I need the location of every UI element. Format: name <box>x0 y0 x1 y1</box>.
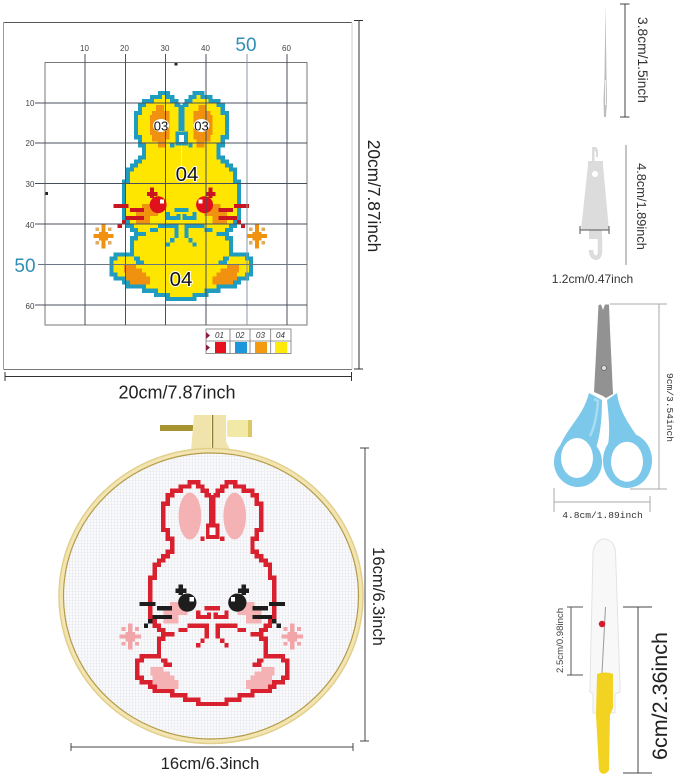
colour region numbers: 04 <box>176 163 198 186</box>
left axis labels <box>14 99 36 311</box>
left axis labels: 40 <box>26 221 35 230</box>
left axis labels: 60 <box>26 302 35 311</box>
icon: seam ripper <box>590 539 620 774</box>
dimension: hoop height: 16cm/6.3inch <box>369 547 388 646</box>
left axis labels: 30 <box>26 180 35 189</box>
stitched rabbit left half <box>137 482 213 704</box>
chart sheet border <box>4 22 352 370</box>
top axis labels: 20 <box>120 44 129 53</box>
dimension: threader width <box>552 226 633 286</box>
dimension: threader height <box>626 145 649 265</box>
ripper needle <box>599 607 606 673</box>
hoop ring <box>59 448 363 744</box>
top axis labels: 60 <box>282 44 291 53</box>
left axis labels: 20 <box>26 139 35 148</box>
colour region numbers: 03 <box>194 118 209 134</box>
dimension: hoop width <box>71 743 353 773</box>
hoop clamp and screw <box>160 415 252 451</box>
dimension: chart height: 20cm/7.87inch <box>364 140 384 252</box>
left pink star <box>119 624 141 650</box>
dimension: chart width: 20cm/7.87inch <box>118 382 236 402</box>
left axis labels: 10 <box>26 99 35 108</box>
left axis labels: 50 <box>14 256 36 277</box>
yellow rabbit pattern <box>93 93 267 299</box>
chart grid <box>35 54 307 325</box>
panel: embroidery hoop <box>59 415 363 744</box>
dimension: scissors height <box>610 304 675 489</box>
colour region numbers: 03 <box>154 118 168 134</box>
dimension: needle length <box>620 4 650 117</box>
right pink star <box>281 624 303 650</box>
colour region numbers: 04 <box>170 268 192 291</box>
dimension: hoop width: 16cm/6.3inch <box>161 754 259 773</box>
rabbit left half <box>112 93 183 299</box>
dimension: ripper length <box>623 607 672 773</box>
icon: needle threader <box>581 147 609 258</box>
dimension: scissors width <box>554 488 650 521</box>
stray dots <box>45 62 178 195</box>
dimension: blade length: 2.5cm/0.98inch <box>555 608 566 673</box>
dimension: scissors height: 9cm/3.54inch <box>664 373 675 442</box>
ripper handle <box>596 672 613 774</box>
stitched rabbit <box>119 482 303 704</box>
icon: needle <box>604 5 607 117</box>
colour legend: 02 <box>236 331 245 340</box>
dimension: hoop height <box>360 448 388 741</box>
icon: scissors <box>554 304 652 488</box>
fabric <box>64 453 358 739</box>
right orange star <box>247 224 267 248</box>
top axis labels: 30 <box>161 44 170 53</box>
dimension: chart width <box>5 372 352 402</box>
dimension: ripper length: 6cm/2.36inch <box>648 632 672 760</box>
left orange star <box>93 224 114 248</box>
ear base box <box>177 133 186 144</box>
dimension: chart height <box>354 20 384 369</box>
stitched rabbit right half <box>212 482 287 704</box>
colour legend: 03 <box>256 331 265 340</box>
panel: pattern chart <box>4 22 352 370</box>
colour legend: 01 <box>215 331 224 340</box>
dimension: threader width: 1.2cm/0.47inch <box>552 272 633 286</box>
stitched ear base <box>208 526 217 537</box>
ripper cap <box>590 539 620 713</box>
top axis labels <box>80 35 291 56</box>
top axis labels: 50 <box>235 35 257 56</box>
rabbit right half <box>180 93 251 299</box>
colour region numbers <box>153 118 210 291</box>
colour legend <box>206 329 291 354</box>
dimension: scissors width: 4.8cm/1.89inch <box>562 510 643 521</box>
dimension: blade length <box>555 607 583 675</box>
colour legend: 04 <box>276 331 285 340</box>
top axis labels: 10 <box>80 44 89 53</box>
dimension: needle length: 3.8cm/1.5inch <box>635 17 650 103</box>
dimension: threader height: 4.8cm/1.89inch <box>634 163 649 250</box>
top axis labels: 40 <box>201 44 210 53</box>
